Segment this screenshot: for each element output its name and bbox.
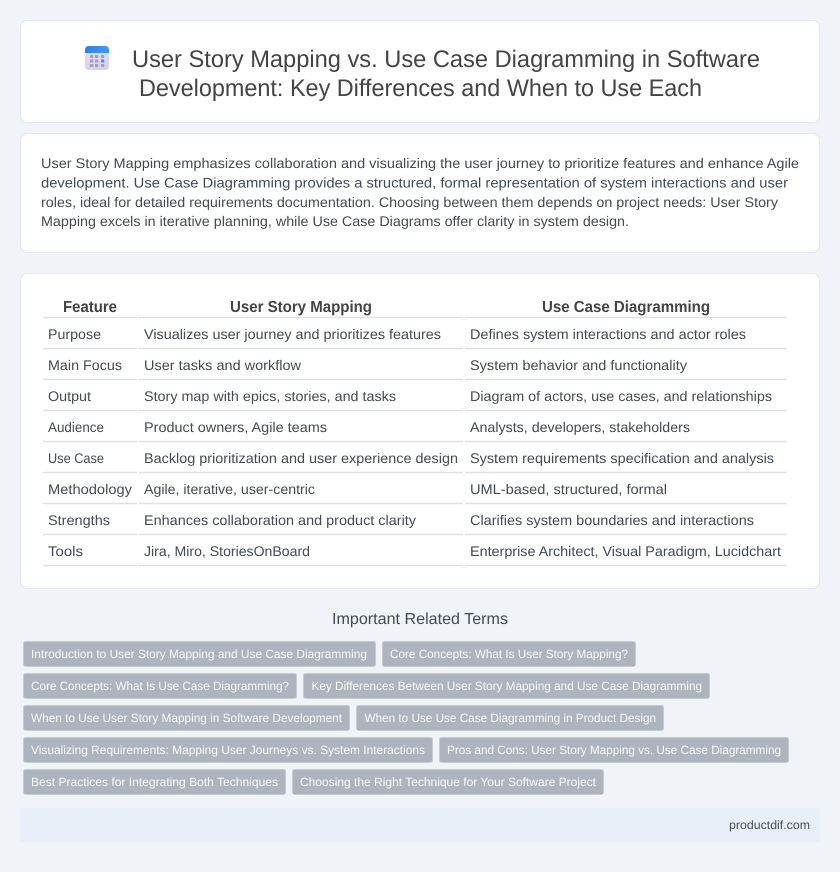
table row: Audience: Product owners, Agile teams (144, 419, 327, 435)
table row: Output: Story map with epics, stories, and tasks (144, 388, 396, 404)
tag group: related terms (24, 642, 788, 794)
tag (24, 738, 432, 762)
tag (356, 706, 664, 730)
table row: Strengths (48, 512, 754, 528)
text block: intro paragraph: roles, ideal for detailed requirements documentation. Choosing between them depends on project needs: User Story (41, 194, 778, 210)
table row: Main Focus: User tasks and workflow (144, 357, 302, 373)
tag (382, 642, 636, 666)
table row: Methodology: UML-based, structured, formal (470, 481, 667, 497)
text block: intro paragraph: Mapping excels in iterative planning, while Use Case Diagrams offer clarity in system design. (41, 213, 629, 229)
title: Development: Key Differences and When to Use Each (139, 75, 702, 102)
text block: intro paragraph (41, 155, 799, 229)
table row: Methodology: Agile, iterative, user-centric (144, 481, 315, 497)
table row: Tools: Tools (48, 543, 83, 559)
table row: Strengths: Strengths (48, 512, 110, 528)
heading: Important Related Terms: Important Related Terms (332, 611, 508, 628)
table row: Audience: Analysts, developers, stakeholders (470, 419, 690, 435)
table row: Use Case: Use Case (48, 450, 104, 466)
table row: Tools (48, 543, 781, 559)
tag (24, 674, 296, 698)
footer (20, 808, 820, 842)
table row: Purpose: Defines system interactions and actor roles (470, 326, 746, 342)
table row: Strengths: Enhances collaboration and product clarity (144, 512, 416, 528)
tag (304, 674, 710, 698)
tag (24, 642, 376, 666)
tag: Visualizing Requirements: Mapping User Journeys vs. System Interactions (31, 743, 425, 757)
table row: Purpose (48, 326, 746, 342)
title (132, 46, 760, 102)
tag (440, 738, 788, 762)
table row: Purpose: Purpose (48, 326, 101, 342)
table row: Output: Output (48, 388, 91, 404)
tag (24, 770, 286, 794)
table row: Output: Diagram of actors, use cases, and relationships (470, 388, 772, 404)
tag: Introduction to User Story Mapping and Use Case Diagramming (31, 647, 367, 661)
title: User Story Mapping vs. Use Case Diagramming in Software (132, 46, 760, 73)
table row: Main Focus (48, 357, 687, 373)
tag: When to Use Use Case Diagramming in Product Design (364, 711, 656, 725)
table header row: Use Case Diagramming (542, 299, 710, 316)
text block: intro paragraph: User Story Mapping emphasizes collaboration and visualizing the user journey to prioritize features and enhance Agile (41, 155, 799, 171)
table row: Main Focus: System behavior and functionality (470, 357, 687, 373)
table row: Use Case: Backlog prioritization and user experience design (144, 450, 458, 466)
table row: Audience (48, 419, 690, 435)
table row: Tools: Jira, Miro, StoriesOnBoard (144, 543, 310, 559)
table row: Use Case (48, 450, 774, 466)
tag: When to Use User Story Mapping in Software Development (31, 711, 343, 725)
panel: header (20, 20, 820, 122)
table row: Audience: Audience (48, 419, 104, 435)
table row: Use Case: System requirements specification and analysis (470, 450, 774, 466)
tag: Choosing the Right Technique for Your Software Project (300, 775, 597, 789)
table row: Purpose: Visualizes user journey and prioritizes features (144, 326, 441, 342)
table row: Tools: Enterprise Architect, Visual Paradigm, Lucidchart (470, 543, 781, 559)
table header row: Feature (63, 299, 117, 316)
tag: Core Concepts: What Is Use Case Diagramming? (31, 679, 289, 693)
table header row: User Story Mapping (230, 299, 372, 316)
panel: comparison table (20, 274, 820, 588)
tag: Best Practices for Integrating Both Techniques (31, 775, 278, 789)
panel: intro text (20, 134, 820, 252)
table row: Output (48, 388, 772, 404)
tag: Core Concepts: What Is User Story Mapping? (390, 647, 628, 661)
footer: productdif.com (729, 818, 810, 832)
tag (292, 770, 604, 794)
tag (24, 706, 350, 730)
tag: Key Differences Between User Story Mapping and Use Case Diagramming (312, 679, 702, 693)
tag: Pros and Cons: User Story Mapping vs. Use Case Diagramming (447, 743, 781, 757)
table row: Methodology: Methodology (48, 481, 132, 497)
table row: Methodology (48, 481, 667, 497)
icon: calendar (85, 46, 109, 70)
table row: Main Focus: Main Focus (48, 357, 122, 373)
table row: Strengths: Clarifies system boundaries and interactions (470, 512, 754, 528)
text block: intro paragraph: development. Use Case Diagramming provides a structured, formal representation of system interactions and user (41, 174, 788, 190)
table header row (63, 299, 710, 316)
